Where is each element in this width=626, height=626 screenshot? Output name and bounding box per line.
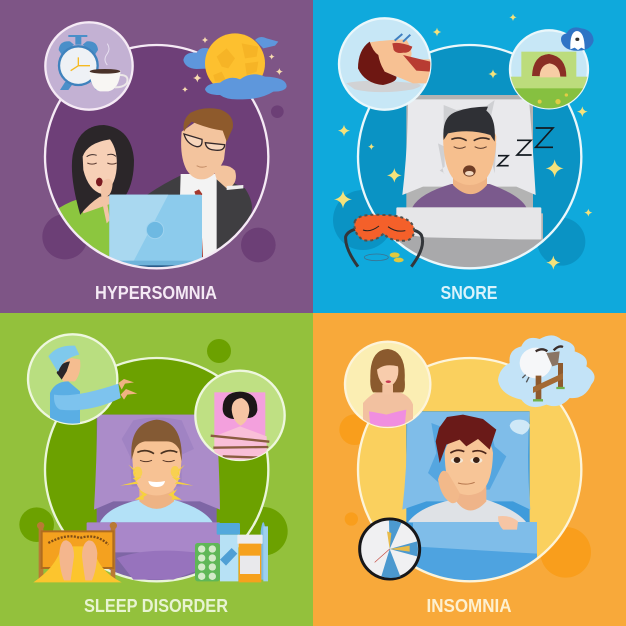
sleeping man in bed <box>396 95 543 270</box>
inset: tired woman <box>345 342 430 428</box>
snore letters <box>498 128 553 166</box>
decorative stars <box>334 14 592 270</box>
ghost cloud <box>561 27 594 51</box>
pills and medicine <box>195 522 268 582</box>
tired man in bed <box>402 411 537 583</box>
moon and clouds <box>182 33 287 99</box>
heading: hypersomnia: HYPERSOMNIA <box>95 283 217 303</box>
man in bed with jaw pain <box>87 415 220 583</box>
sleep mask and earplugs <box>346 215 423 267</box>
panel: sleep disorder <box>0 313 313 626</box>
panel: snore <box>313 0 626 313</box>
heading: sleep disorder: SLEEP DISORDER <box>84 596 228 616</box>
restless feet at footboard <box>33 522 122 582</box>
inset: ghost dream <box>506 30 593 112</box>
man torso <box>412 184 526 207</box>
panel: hypersomnia <box>0 0 313 313</box>
blanket <box>396 207 541 239</box>
inset: airway anatomy <box>339 18 430 110</box>
small sheep cloud <box>510 420 530 435</box>
lightning pain marks <box>120 465 193 500</box>
wall clock <box>360 519 420 579</box>
panel: insomnia <box>313 313 626 626</box>
inset: bound woman <box>195 371 285 460</box>
heading: insomnia: INSOMNIA <box>426 596 512 616</box>
pillow <box>402 99 536 195</box>
woman yawning <box>58 125 134 263</box>
man resting on hand <box>147 108 252 263</box>
laptop <box>109 194 202 268</box>
face <box>443 131 496 185</box>
blanket <box>87 522 220 580</box>
thought cloud: counting sheep <box>498 335 595 407</box>
inset: sleepwalker <box>28 334 137 426</box>
people with laptop <box>58 108 252 269</box>
inset: alarm clock and coffee <box>45 22 133 110</box>
heading: snore: SNORE <box>440 283 498 303</box>
